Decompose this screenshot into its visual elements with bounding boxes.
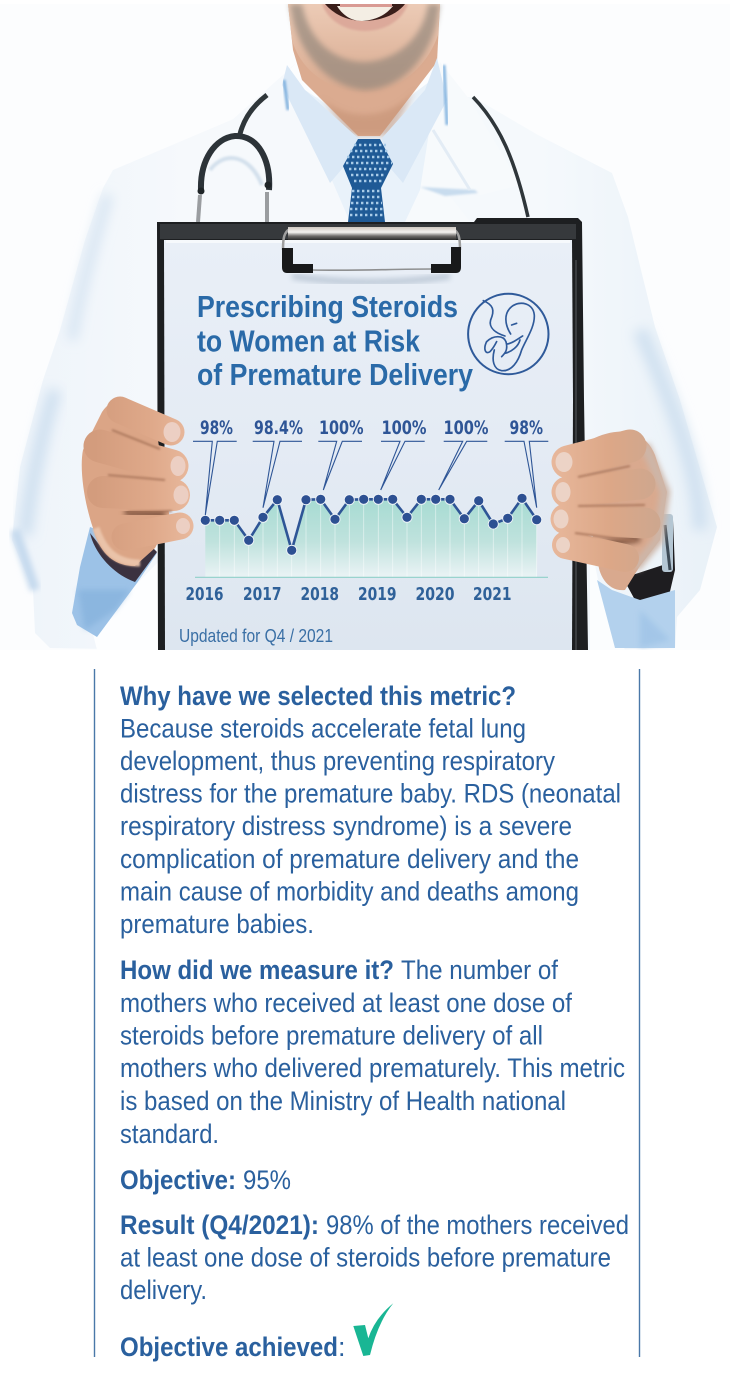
callout values: 98%	[200, 417, 233, 439]
face and neck	[288, 4, 440, 136]
title: Prescribing Steroids	[197, 289, 458, 324]
photo: doctor holding clipboard	[0, 4, 730, 650]
text block: why this metric: distress for the premature baby. RDS (neonatal	[120, 778, 621, 808]
text block: why this metric: premature babies.	[120, 909, 314, 939]
right blue shirt cuff	[597, 580, 675, 648]
title: of Premature Delivery	[197, 357, 474, 392]
shirt and lapels	[306, 84, 478, 222]
clipboard clip	[282, 227, 461, 282]
year axis labels: 2019	[358, 584, 396, 605]
icon: green check mark	[353, 1303, 393, 1356]
text block: why this metric: Because steroids accelerate fetal lung	[120, 714, 526, 744]
text block: result	[120, 1210, 629, 1305]
tie	[343, 139, 393, 222]
text block: why this metric	[120, 681, 621, 939]
text block: result: delivery.	[120, 1275, 207, 1305]
right hand	[554, 432, 667, 590]
icon: fetus in circle	[468, 294, 548, 374]
text block: result: at least one dose of steroids before premature	[120, 1242, 611, 1272]
line chart: steroid prescribing by quarter	[186, 417, 548, 605]
clipboard	[157, 218, 588, 650]
text block: how measured: mothers who received at least one dose of	[120, 988, 572, 1018]
text block: result: 98% of the mothers received	[326, 1210, 629, 1240]
text block: why this metric: complication of premature delivery and the	[120, 844, 579, 874]
wristwatch	[623, 514, 675, 600]
chart area fill	[205, 498, 537, 577]
callout leaders	[193, 441, 548, 515]
stethoscope	[198, 95, 528, 222]
year axis labels: 2021	[473, 584, 512, 605]
callout values: 100%	[382, 417, 426, 439]
shirt collar	[282, 58, 447, 183]
year axis labels: 2020	[416, 584, 454, 605]
text block: objective achieved: Objective achieved	[120, 1332, 338, 1362]
callout values: 98.4%	[254, 417, 303, 439]
callout values: 98%	[510, 417, 543, 439]
text block: how measured	[120, 955, 625, 1149]
left text rule	[94, 669, 96, 1357]
callout values	[200, 417, 543, 439]
text block: how measured: is based on the Ministry of Health national	[120, 1086, 566, 1116]
text block: objective: 95%	[243, 1165, 291, 1195]
right text rule	[638, 669, 640, 1357]
text block: why this metric: Why have we selected this metric?	[120, 681, 516, 711]
left blue shirt cuff	[72, 527, 157, 637]
year axis labels	[186, 584, 512, 605]
text block: objective achieved: :	[338, 1332, 346, 1362]
text block: how measured: steroids before premature delivery of all	[120, 1020, 543, 1050]
text block: how measured: mothers who delivered prematurely. This metric	[120, 1053, 625, 1083]
text block: how measured: standard.	[120, 1119, 219, 1149]
text block: result: Result (Q4/2021):	[120, 1210, 319, 1240]
title: to Women at Risk	[197, 324, 421, 358]
data markers	[201, 494, 541, 555]
year axis labels: 2017	[243, 584, 282, 605]
doctor lab coat	[12, 97, 717, 650]
text block: why this metric: main cause of morbidity and deaths among	[120, 876, 579, 906]
left hand	[82, 400, 190, 566]
text block: why this metric: development, thus preventing respiratory	[120, 746, 555, 776]
year axis labels: 2016	[186, 584, 224, 605]
year axis labels: 2018	[300, 584, 339, 605]
text block: why this metric: respiratory distress syndrome) is a severe	[120, 811, 572, 841]
title	[197, 289, 474, 392]
text block: how measured: The number of	[401, 955, 558, 985]
callout values: 100%	[444, 417, 488, 439]
callout values: 100%	[319, 417, 364, 439]
text block: objective: Objective:	[120, 1165, 236, 1195]
update note: Updated for Q4 / 2021	[179, 625, 333, 646]
data line	[205, 498, 537, 550]
text block: how measured: How did we measure it?	[120, 955, 394, 985]
